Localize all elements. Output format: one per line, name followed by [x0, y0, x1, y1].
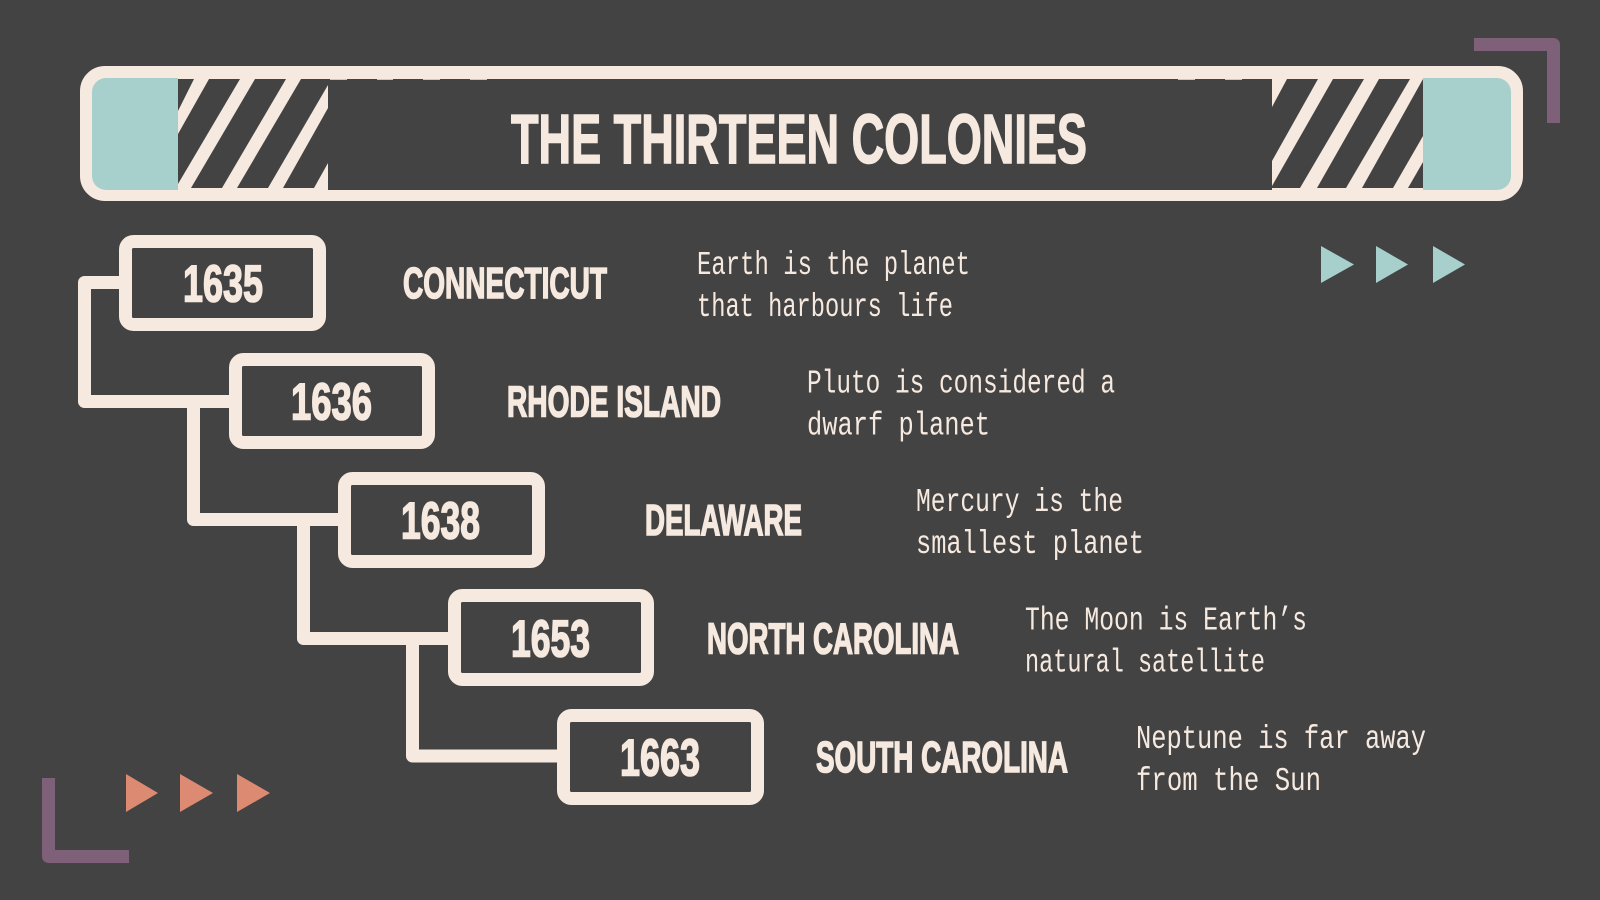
description: Pluto is considered a — [807, 366, 1115, 402]
banner centre panel — [328, 79, 1272, 190]
year box — [126, 242, 320, 324]
description: Mercury is the — [916, 484, 1123, 521]
description — [916, 484, 1144, 563]
corner bracket: top right — [1474, 44, 1554, 123]
row: 1638 Delaware — [344, 478, 1144, 563]
teal end cap: right — [1423, 78, 1511, 190]
description: natural satellite — [1025, 644, 1265, 682]
stripes: right — [1272, 79, 1423, 188]
year: 1636 — [291, 374, 372, 432]
arrows: teal — [1321, 246, 1465, 283]
year box — [236, 360, 428, 442]
year: 1663 — [620, 730, 700, 788]
year box — [344, 478, 538, 562]
description: Earth is the planet — [697, 247, 970, 284]
description: smallest planet — [916, 526, 1144, 563]
banner title text: THE THIRTEEN COLONIES — [511, 100, 1087, 178]
description — [1136, 721, 1426, 800]
description: Neptune is far away — [1136, 721, 1426, 758]
row: 1635 Connecticut — [126, 242, 970, 326]
state name: NORTH CAROLINA — [707, 614, 959, 664]
year: 1638 — [401, 492, 480, 550]
state name: CONNECTICUT — [403, 259, 607, 308]
description — [697, 247, 970, 326]
banner top-edge stripe remnants — [330, 79, 1242, 80]
row: 1636 Rhode Island — [236, 360, 1115, 444]
description: from the Sun — [1136, 763, 1321, 800]
teal end cap: left — [92, 78, 178, 190]
year box — [564, 716, 758, 798]
description — [807, 366, 1115, 444]
year: 1635 — [183, 256, 263, 314]
arrows: orange — [126, 774, 270, 812]
row: 1663 South Carolina — [564, 716, 1426, 800]
state name: RHODE ISLAND — [507, 378, 721, 426]
description: that harbours life — [697, 289, 953, 326]
description: dwarf planet — [807, 408, 990, 444]
description: The Moon is Earth’s — [1025, 602, 1307, 640]
row: 1653 North Carolina — [454, 596, 1307, 682]
title banner — [86, 72, 1517, 195]
description — [1025, 602, 1307, 682]
timeline connectors — [84, 282, 563, 756]
year box — [454, 596, 648, 680]
state name: DELAWARE — [645, 496, 802, 545]
year: 1653 — [511, 610, 590, 668]
banner frame — [86, 72, 1517, 195]
state name: SOUTH CAROLINA — [816, 733, 1068, 782]
corner bracket: bottom left — [48, 778, 129, 856]
stripes: left — [178, 79, 328, 188]
